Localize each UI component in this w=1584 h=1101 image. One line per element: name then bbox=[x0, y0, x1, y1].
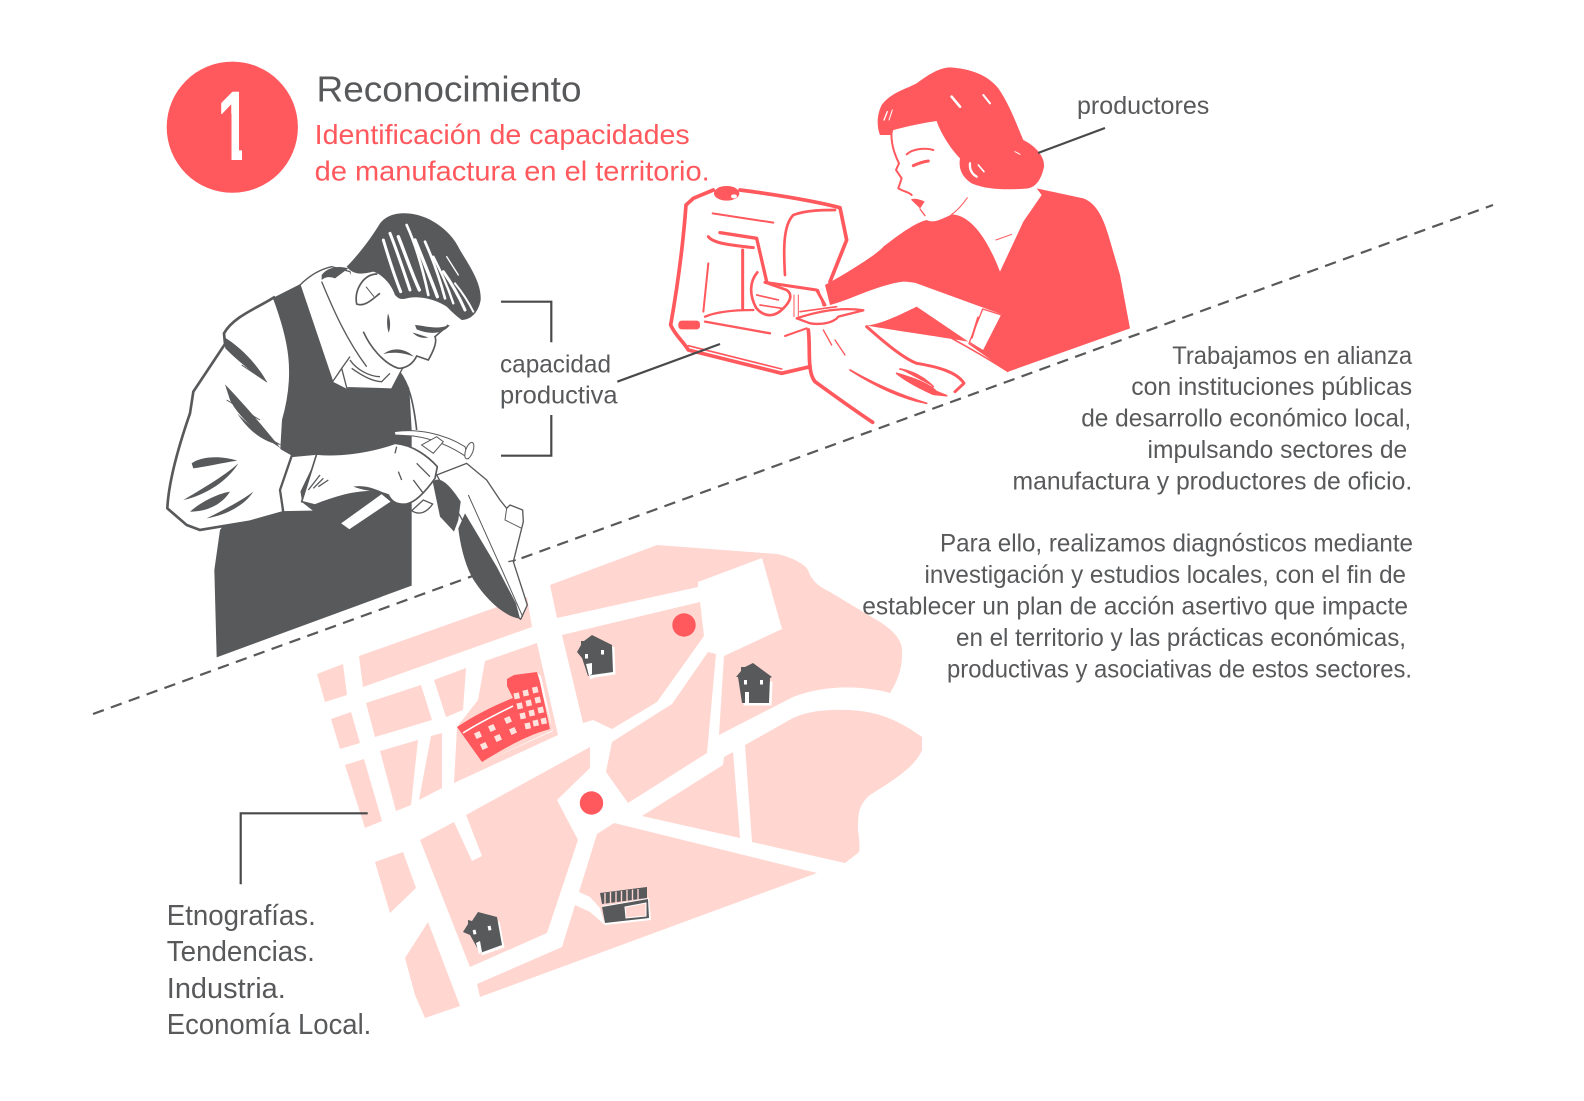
list: research types: Industria. bbox=[167, 973, 286, 1005]
text block: diagnosticos: Para ello, realizamos diagnósticos mediante bbox=[940, 530, 1413, 558]
icon: shop bbox=[600, 887, 651, 925]
list: research types: Etnografías. bbox=[167, 900, 316, 932]
subtitle bbox=[315, 119, 710, 187]
map: triangle block bbox=[642, 752, 740, 838]
map: south-east block bbox=[745, 710, 922, 863]
sleeve bbox=[167, 297, 293, 530]
list: research types: Economía Local. bbox=[167, 1009, 371, 1041]
callout: capacidad productiva bbox=[500, 302, 720, 456]
text block: diagnosticos: productivas y asociativas de estos sectores. bbox=[947, 656, 1412, 684]
face lines bbox=[891, 130, 1012, 240]
hands bbox=[751, 272, 863, 324]
number badge bbox=[167, 62, 298, 193]
map: east block bbox=[719, 554, 902, 735]
text block: diagnosticos: en el territorio y las prácticas económicas, bbox=[956, 624, 1406, 652]
hair bbox=[878, 67, 1044, 189]
callout: productores bbox=[1038, 92, 1209, 153]
text block: alianza: impulsando sectores de bbox=[1148, 436, 1407, 464]
label text: capacidad bbox=[500, 351, 611, 379]
text block: alianza: con instituciones públicas bbox=[1131, 373, 1412, 401]
text block: diagnosticos bbox=[862, 530, 1413, 684]
fabric bbox=[808, 327, 964, 422]
leader line bbox=[617, 344, 720, 382]
map: west blocks bbox=[317, 597, 590, 1018]
text block: alianza: de desarrollo económico local, bbox=[1081, 405, 1411, 433]
dashed diagonal divider bbox=[93, 205, 1493, 714]
map: location dot centre bbox=[580, 791, 603, 815]
map: house block bbox=[562, 602, 704, 729]
forearm and hand bbox=[302, 443, 437, 513]
callout leader: map bbox=[241, 813, 368, 884]
subtitle: Identificación de capacidades bbox=[315, 119, 690, 150]
illustration: man working on a shoe bbox=[167, 213, 527, 657]
text block: diagnosticos: investigación y estudios locales, con el fin de bbox=[924, 561, 1406, 589]
sewing machine bbox=[671, 186, 847, 373]
number badge: 1 bbox=[216, 73, 252, 180]
infographic: reconocimiento bbox=[92, 62, 1494, 1034]
icon: house east bbox=[736, 663, 772, 706]
map: middle block bbox=[606, 652, 716, 803]
icon: factory bbox=[457, 672, 553, 764]
title: Reconocimiento bbox=[316, 69, 582, 110]
map: lower block bbox=[477, 823, 817, 997]
label text bbox=[500, 351, 618, 409]
map: location dot north bbox=[672, 613, 696, 637]
shirt strap edge bbox=[399, 372, 417, 430]
head bbox=[350, 233, 472, 368]
list: research types: Tendencias. bbox=[167, 936, 315, 968]
callout: productores: productores bbox=[1077, 92, 1209, 120]
text block: alianza bbox=[1012, 342, 1412, 495]
shoe bbox=[433, 463, 527, 619]
map: top block bbox=[550, 545, 777, 618]
text block: diagnosticos: establecer un plan de acción asertivo que impacte bbox=[862, 592, 1408, 620]
illustration: woman at sewing machine bbox=[671, 67, 1130, 422]
subtitle: de manufactura en el territorio. bbox=[315, 156, 710, 187]
hair bbox=[347, 213, 481, 320]
apron bbox=[214, 283, 412, 657]
text block: alianza: manufactura y productores de oficio. bbox=[1012, 467, 1412, 495]
cuff, sleeve wedge bbox=[867, 307, 1008, 372]
bracket bbox=[501, 302, 551, 456]
icon: house north bbox=[577, 635, 616, 680]
collar bbox=[300, 267, 403, 389]
text block: alianza: Trabajamos en alianza bbox=[1172, 342, 1412, 370]
hammer handle bbox=[340, 493, 392, 530]
top tool bbox=[394, 431, 476, 460]
label text: productiva bbox=[500, 381, 618, 409]
cuff bbox=[280, 453, 320, 512]
list: research types bbox=[167, 900, 371, 1041]
sweater bbox=[825, 188, 1130, 372]
icon: house south bbox=[463, 912, 504, 956]
map bbox=[317, 545, 922, 1018]
